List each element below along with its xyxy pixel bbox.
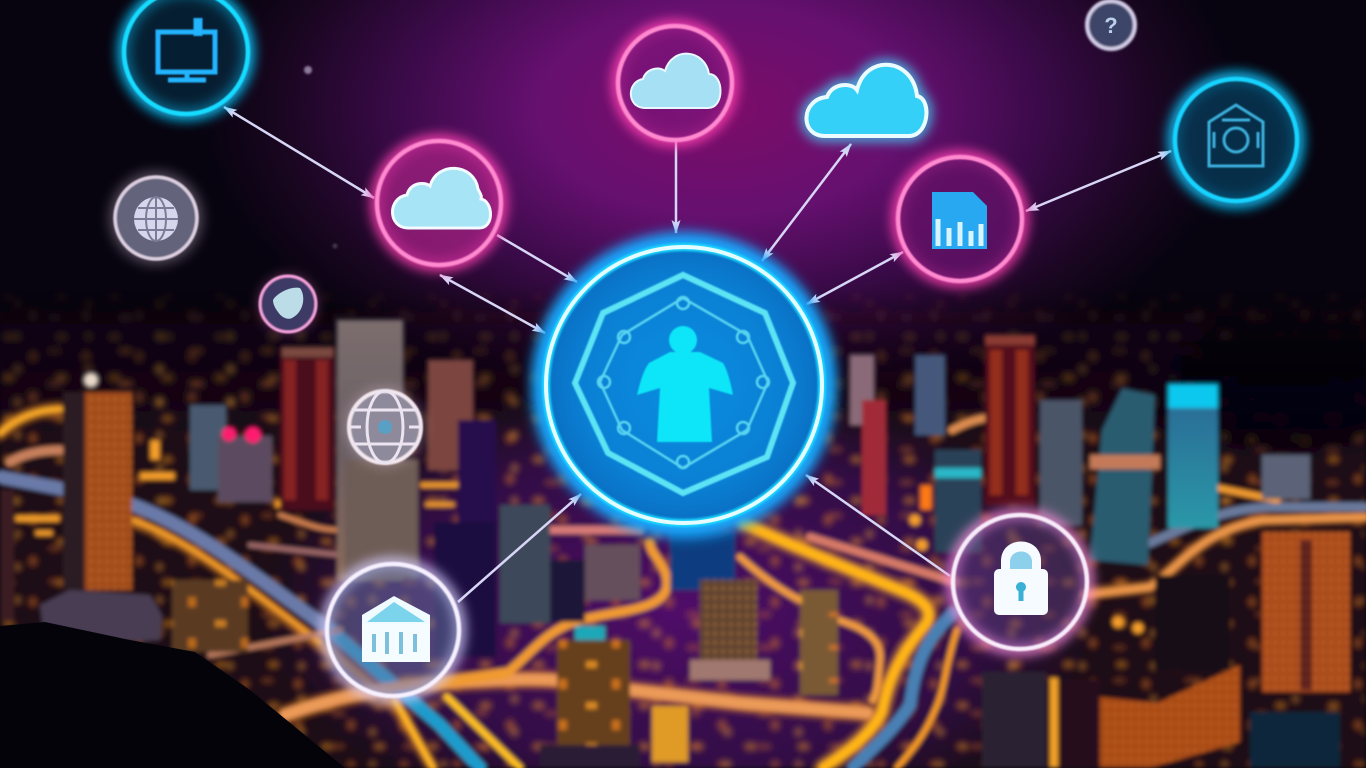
hub octagon frame xyxy=(575,275,793,493)
node: leaf xyxy=(258,274,318,334)
arrows xyxy=(224,107,1171,602)
node: bank xyxy=(326,563,460,697)
node: document chart xyxy=(898,157,1022,281)
node: question mark: ? xyxy=(1104,13,1118,38)
node: globe xyxy=(109,171,203,265)
node: house xyxy=(1174,78,1298,202)
icon: cyan cloud xyxy=(806,65,926,136)
central hub xyxy=(542,243,826,527)
roads xyxy=(0,409,1366,768)
node: cloud top xyxy=(618,26,732,140)
node: padlock xyxy=(952,514,1088,650)
node: monitor xyxy=(124,0,248,114)
hub person icon xyxy=(637,326,733,442)
hub inner ring xyxy=(598,297,769,468)
distant stars xyxy=(304,66,338,248)
node: question mark xyxy=(1087,1,1135,49)
foreground hill xyxy=(0,622,345,768)
city skyline and roads xyxy=(0,285,1366,768)
node: network globe xyxy=(345,387,425,467)
city ground and lights xyxy=(0,285,1366,768)
node: cloud left xyxy=(377,141,501,265)
bright street lights xyxy=(15,440,1144,634)
buildings xyxy=(0,320,1350,768)
road glow xyxy=(0,409,1366,768)
